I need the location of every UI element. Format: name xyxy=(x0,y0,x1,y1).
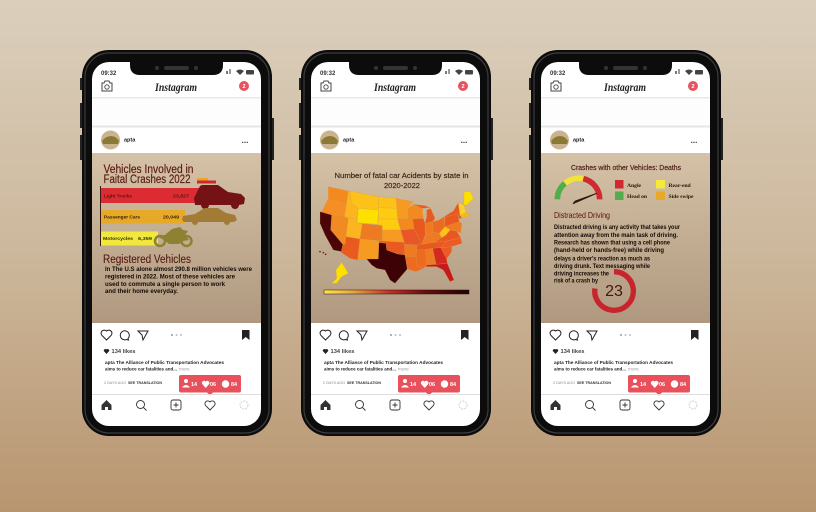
status bar: 09:32 xyxy=(320,71,336,77)
body text: delays a driver's reaction as much as xyxy=(554,256,651,262)
phone body xyxy=(529,50,723,436)
app header xyxy=(102,80,249,94)
bottom nav xyxy=(92,394,261,410)
phone body xyxy=(80,50,274,436)
post header: apta xyxy=(124,138,136,144)
app header: 2 xyxy=(461,84,465,90)
stories strip xyxy=(92,97,261,128)
status bar xyxy=(101,69,254,77)
notification bubble: 84 xyxy=(680,382,687,388)
notification bubble xyxy=(179,375,241,396)
status bar: 09:32 xyxy=(101,71,117,77)
post caption xyxy=(553,349,673,385)
post header xyxy=(320,130,467,150)
post header xyxy=(550,130,697,150)
body text: attention away from the main task of driving. xyxy=(554,233,678,239)
post caption: apta The Alliance of Public Transportation Advocates xyxy=(554,360,673,365)
panel: map xyxy=(311,153,480,323)
legend: Angle xyxy=(627,183,642,189)
notification bubble: 84 xyxy=(450,382,457,388)
post caption: aims to reduce car fatalities and... xyxy=(324,366,396,372)
stories strip xyxy=(541,97,710,128)
body text: driving drunk. Text messaging while xyxy=(554,264,651,270)
map title: Number of fatal car Acidents by state in xyxy=(334,171,468,180)
app header xyxy=(321,80,468,94)
body text: and their home everyday. xyxy=(105,289,178,295)
notification bubble xyxy=(628,375,690,396)
post caption xyxy=(104,349,224,385)
legend xyxy=(615,180,694,200)
heading: Vehicles Involved in xyxy=(104,164,194,176)
post caption: 134 likes xyxy=(560,349,584,355)
icon: car xyxy=(182,208,237,225)
post caption: apta The Alliance of Public Transportation Advocates xyxy=(105,360,224,365)
donut 23: 23 xyxy=(605,283,623,300)
map title xyxy=(334,171,468,190)
post caption: 134 likes xyxy=(112,349,136,355)
post caption: more xyxy=(398,366,409,372)
app header xyxy=(551,80,698,94)
stories strip xyxy=(311,97,480,128)
subheading: Registered Vehicles xyxy=(103,254,191,266)
app header: Instagram xyxy=(154,80,197,94)
bar chart: 20,049 xyxy=(163,214,179,220)
post actions xyxy=(320,330,468,340)
body text: registered in 2022. Most of these vehicles are xyxy=(105,274,236,280)
panel: crashes and distracted driving xyxy=(541,153,710,323)
post actions xyxy=(550,330,698,340)
post caption: aims to reduce car fatalities and... xyxy=(554,366,626,372)
flag accent xyxy=(197,178,216,184)
post caption: more xyxy=(179,366,190,372)
panel: vehicles xyxy=(92,153,261,323)
donut 23 xyxy=(595,272,633,310)
post caption: 2 DAYS AGO xyxy=(104,381,126,385)
notification bubble: 06 xyxy=(429,382,435,388)
bar chart: Light Trucks xyxy=(104,194,132,200)
bar chart: Passenger Cars xyxy=(104,214,140,220)
notification bubble xyxy=(398,375,460,396)
post caption: aims to reduce car fatalities and... xyxy=(105,366,177,372)
post caption: apta The Alliance of Public Transportation Advocates xyxy=(324,360,443,365)
subheading: Distracted Driving xyxy=(554,210,610,220)
post caption: 134 likes xyxy=(330,349,354,355)
post caption: more xyxy=(628,366,639,372)
gauge heading: Crashes with other Vehicles: Deaths xyxy=(571,165,681,172)
post actions xyxy=(101,330,250,340)
phone 1: vehicles involved xyxy=(80,50,274,436)
notification bubble: 06 xyxy=(659,382,665,388)
notification bubble: 06 xyxy=(210,382,216,388)
app header: Instagram xyxy=(603,80,646,94)
bottom nav xyxy=(541,394,710,410)
status bar xyxy=(550,69,703,77)
phone 2: map xyxy=(299,50,493,436)
legend: Head on xyxy=(627,194,648,200)
heading line 2: Faital Crashes 2022 xyxy=(104,174,190,186)
legend: Rear-end xyxy=(668,183,692,189)
post header: ... xyxy=(461,136,467,145)
bar chart xyxy=(100,186,199,246)
app header: 2 xyxy=(242,84,246,90)
legend: Side swipe xyxy=(668,194,694,200)
body text: used to commute a single person to work xyxy=(105,282,226,288)
body text: risk of a crash by xyxy=(554,278,599,284)
body text: driving increases the xyxy=(554,272,610,278)
post caption: SEE TRANSLATION xyxy=(128,381,162,385)
post caption: SEE TRANSLATION xyxy=(577,381,611,385)
body text xyxy=(105,267,253,295)
post header xyxy=(101,130,248,150)
bar chart: 6,359 xyxy=(138,236,152,242)
body text: Research has shown that using a cell phone xyxy=(554,240,671,246)
status bar: 09:32 xyxy=(550,71,566,77)
bar chart: 23,827 xyxy=(173,194,189,200)
body text xyxy=(554,225,681,284)
phone 3: distracted driving xyxy=(529,50,723,436)
post header: apta xyxy=(343,138,355,144)
notification bubble: 84 xyxy=(231,382,238,388)
bottom nav xyxy=(311,394,480,410)
post header: apta xyxy=(573,138,585,144)
post caption xyxy=(323,349,443,385)
notification bubble: 14 xyxy=(191,382,198,388)
app header: Instagram xyxy=(373,80,416,94)
post caption: 2 DAYS AGO xyxy=(323,381,345,385)
post caption: 2 DAYS AGO xyxy=(553,381,575,385)
phone body xyxy=(299,50,493,436)
icon: truck xyxy=(194,185,245,209)
body text: (hand-held or hands-free) while driving xyxy=(554,248,664,254)
colour scale legend xyxy=(324,290,469,294)
body text: Distracted driving is any activity that takes your xyxy=(554,225,681,231)
status bar xyxy=(320,69,473,77)
notification bubble: 14 xyxy=(640,382,647,388)
icon: motorcycle xyxy=(155,227,192,246)
post caption: SEE TRANSLATION xyxy=(347,381,381,385)
map title: 2020-2022 xyxy=(384,181,420,190)
choropleth map of US states xyxy=(319,187,473,283)
app header: 2 xyxy=(691,84,695,90)
notification bubble: 14 xyxy=(410,382,417,388)
body text: In The U.S alone almost 290.8 million vehicles were xyxy=(105,267,253,273)
post header: ... xyxy=(242,136,248,145)
post header: ... xyxy=(691,136,697,145)
bar chart: Motorcycles xyxy=(103,236,133,242)
gauge xyxy=(557,178,600,204)
